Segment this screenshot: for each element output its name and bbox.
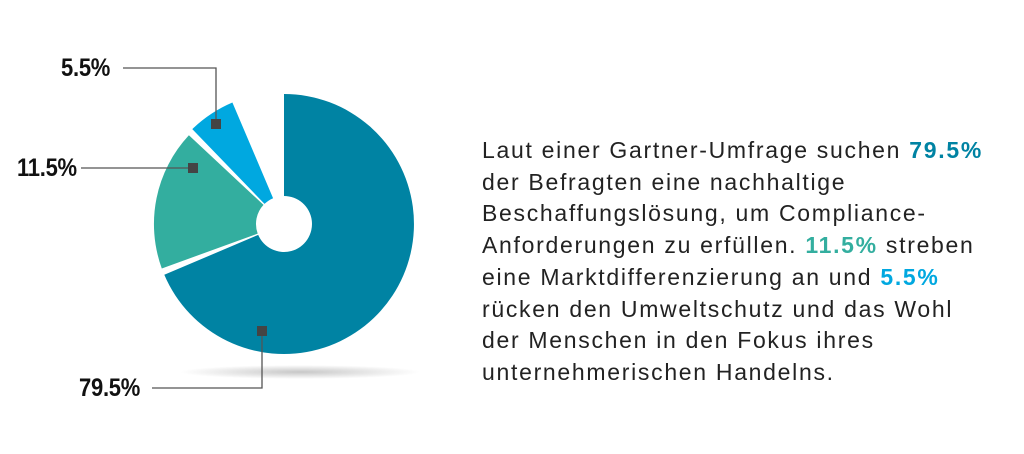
text block: unternehmerischen Handelns. [482, 359, 835, 385]
markers [188, 119, 267, 336]
leader lines [81, 68, 262, 388]
text block [482, 137, 983, 385]
label 11.5%: 11.5% [17, 154, 77, 182]
label 5.5%: 5.5% [61, 54, 110, 82]
text block: rücken den Umweltschutz und das Wohl [482, 296, 953, 322]
text block: Laut einer Gartner-Umfrage suchen 79.5% [482, 137, 983, 163]
text block: der Menschen in den Fokus ihres [482, 327, 875, 353]
text block: der Befragten eine nachhaltige [482, 169, 846, 195]
text block: Anforderungen zu erfüllen. 11.5% streben [482, 232, 975, 258]
slice: 5.5% [192, 102, 273, 204]
text block: eine Marktdifferenzierung an und 5.5% [482, 264, 940, 290]
slice: 79.5% [164, 94, 414, 354]
label 79.5%: 79.5% [79, 374, 140, 402]
slice: 11.5% [154, 135, 264, 268]
shadow [180, 365, 420, 379]
text block: Beschaffungslösung, um Compliance- [482, 200, 927, 226]
